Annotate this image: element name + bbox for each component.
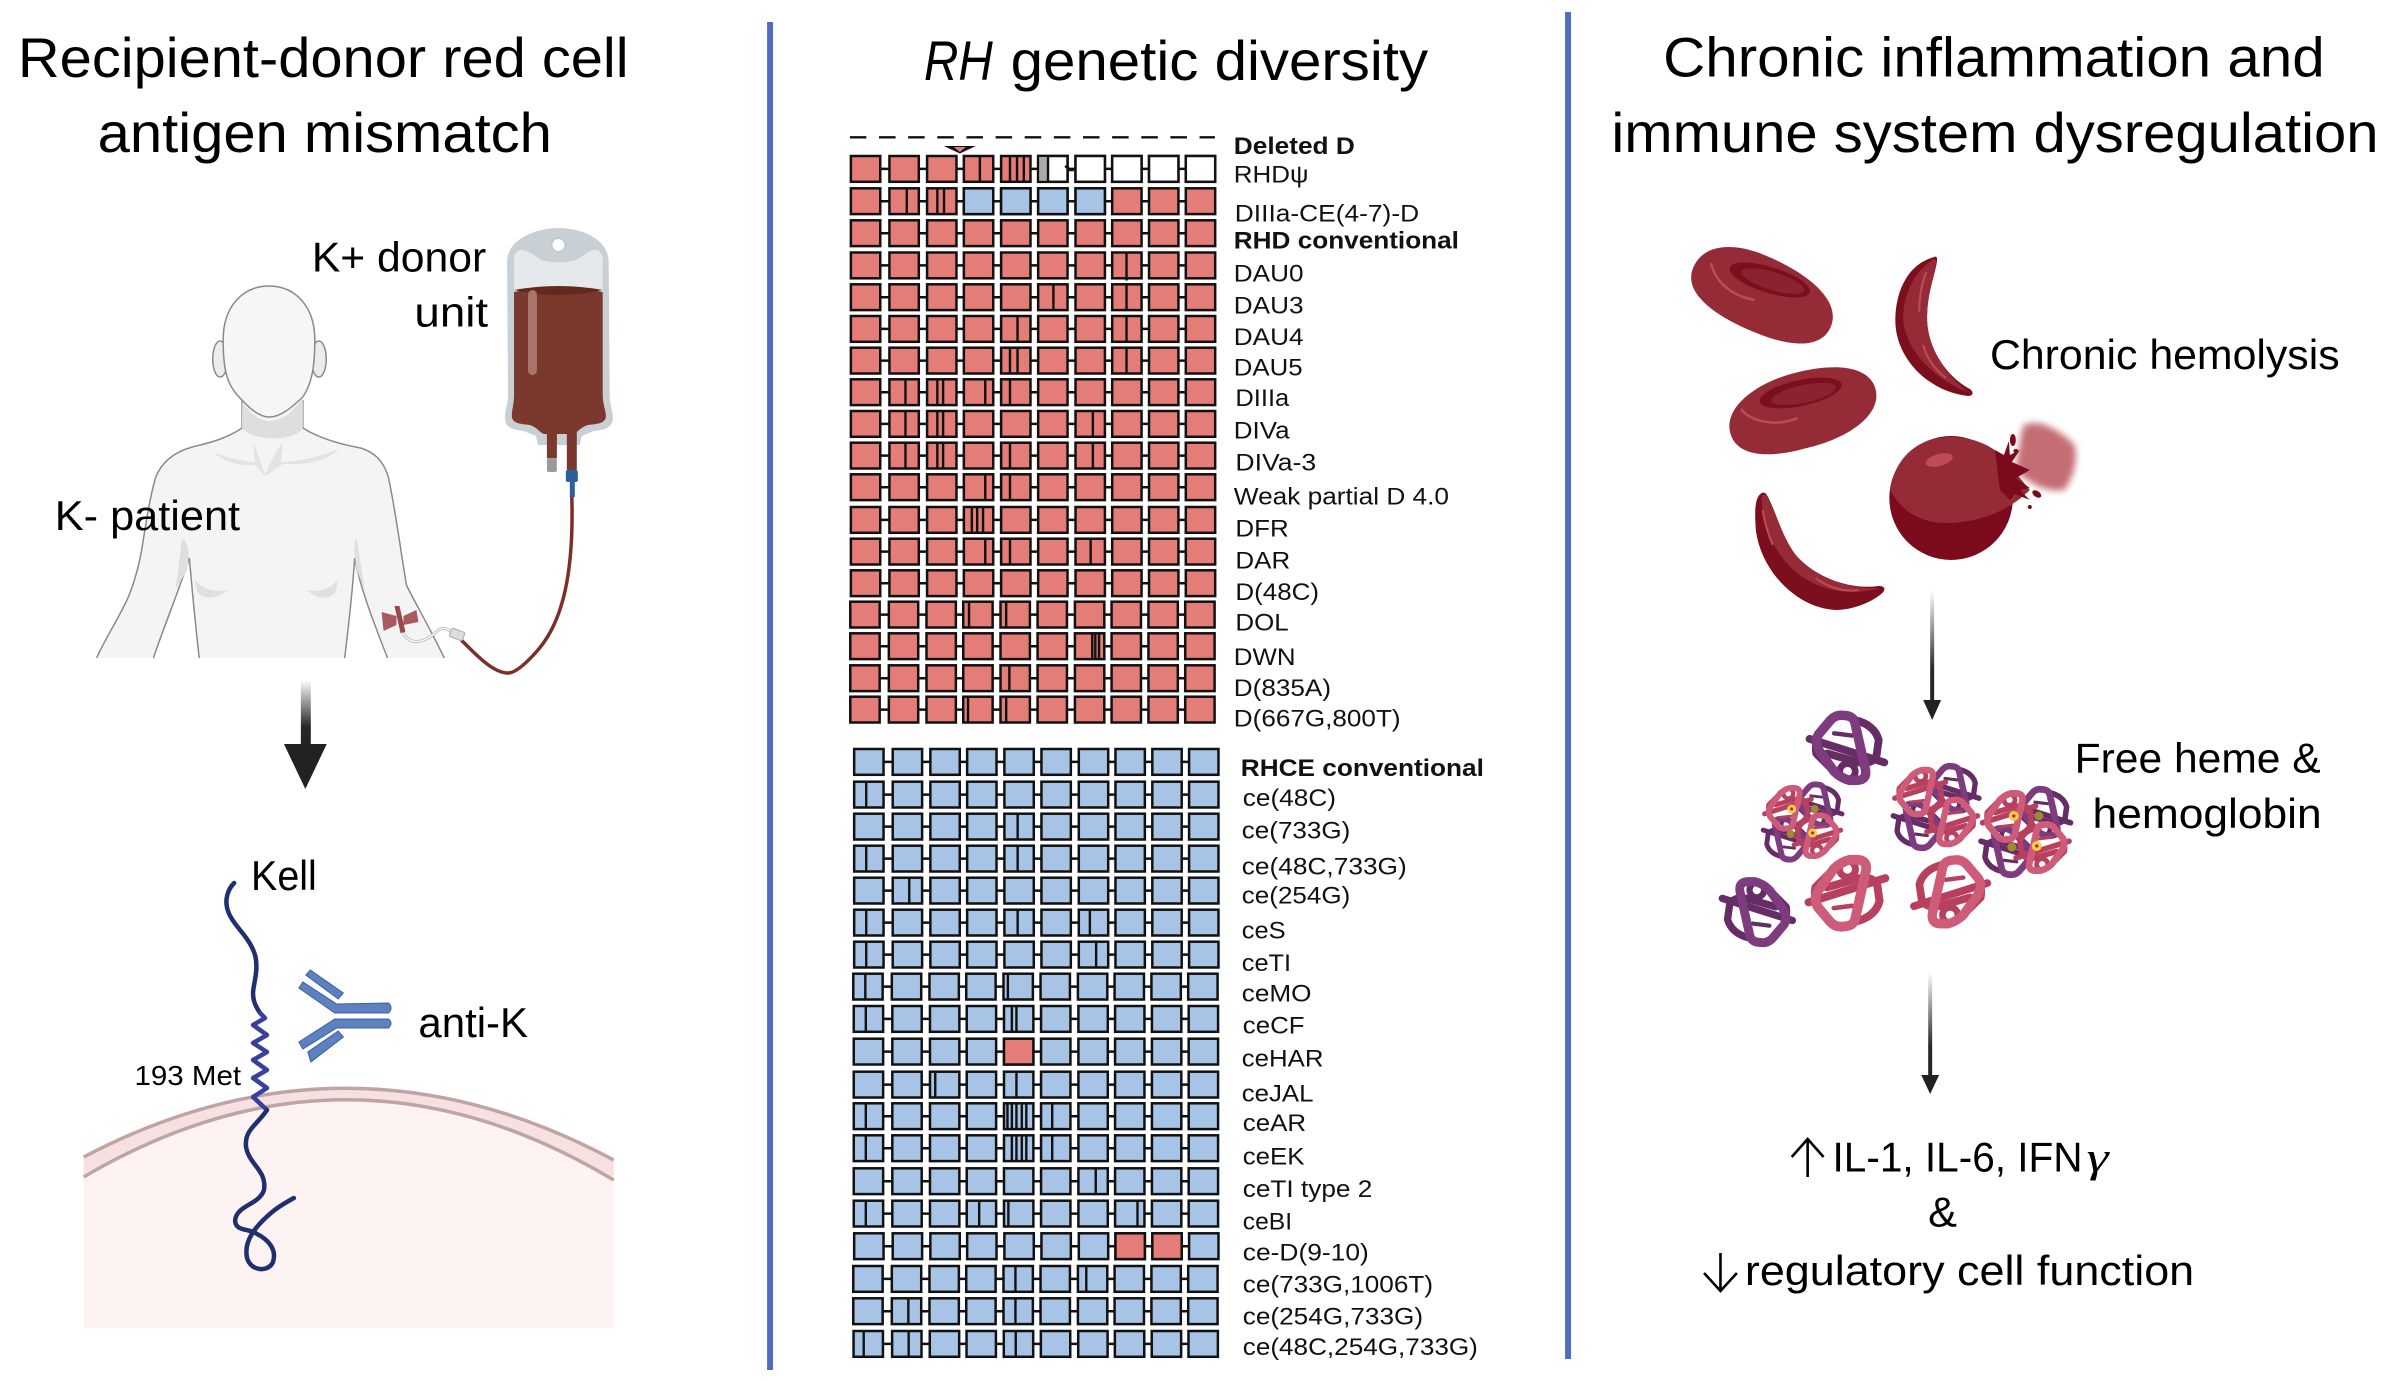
row: ceTI type 2 — [854, 1168, 1372, 1203]
row: DIIIa-CE(4-7)-D: DIIIa-CE(4-7)-D — [1235, 201, 1419, 228]
row: Deleted D: Deleted D — [1234, 133, 1355, 160]
heading: right panel: Chronic inflammation and — [1663, 26, 2325, 89]
heading: left panel — [18, 26, 629, 164]
row: ce(48C,254G,733G): ce(48C,254G,733G) — [1243, 1334, 1478, 1361]
row: ceAR: ceAR — [1243, 1110, 1306, 1137]
row: DWN — [850, 633, 1296, 671]
row: ce(48C,254G,733G) — [854, 1331, 1478, 1361]
text: immune changes — [1704, 1134, 2194, 1294]
row: D(835A) — [850, 665, 1331, 702]
row: ce(733G,1006T) — [853, 1266, 1433, 1298]
illustration: patient figure — [97, 286, 444, 658]
row: ce(48C,733G) — [854, 846, 1407, 880]
row: ce(254G,733G): ce(254G,733G) — [1243, 1303, 1423, 1330]
illustration: blood bag — [505, 228, 613, 497]
row: ceEK — [854, 1135, 1305, 1170]
row: DAU0: DAU0 — [1234, 261, 1304, 288]
row: RHCE conventional: RHCE conventional — [1241, 755, 1484, 782]
row: D(667G,800T) — [850, 697, 1401, 733]
label: K+ donor unit: unit — [414, 289, 489, 336]
row: Weak partial D 4.0: Weak partial D 4.0 — [1234, 483, 1449, 510]
row: ce(48C): ce(48C) — [1243, 785, 1336, 812]
row: D(835A): D(835A) — [1234, 675, 1331, 702]
icon: lysing red cell — [1889, 423, 2076, 560]
row: ceTI type 2: ceTI type 2 — [1243, 1176, 1372, 1203]
row: DOL: DOL — [1235, 610, 1289, 637]
row: ce(254G): ce(254G) — [1242, 882, 1350, 909]
label: Free heme & hemoglobin: hemoglobin — [2093, 790, 2322, 837]
row: ceBI — [854, 1201, 1292, 1235]
heading: left panel: Recipient-donor red cell — [18, 26, 629, 89]
row: ceJAL — [854, 1072, 1314, 1108]
label: anti-K: anti-K — [418, 999, 528, 1046]
icon: biconcave red cell lower — [1720, 356, 1885, 464]
row: DIIIa: DIIIa — [1235, 385, 1290, 412]
illustration: Kell protein — [226, 883, 294, 1269]
row: ceTI: ceTI — [1242, 950, 1291, 977]
row: DAU4: DAU4 — [1234, 324, 1304, 351]
icon: sickle cell upper — [1895, 257, 1973, 396]
row: ceS — [854, 910, 1286, 944]
arrow: free heme to immune changes — [1921, 972, 1939, 1094]
row: ce(48C,733G): ce(48C,733G) — [1242, 853, 1407, 880]
divider: left — [767, 22, 773, 1370]
row: ceEK: ceEK — [1243, 1143, 1305, 1170]
illustration: transfusion tube and butterfly needle — [382, 497, 572, 673]
row: RHDψ: RHDψ — [1234, 162, 1309, 189]
row: ceBI: ceBI — [1243, 1208, 1292, 1235]
icon: biconcave red cell upper — [1680, 233, 1846, 356]
row: ceHAR: ceHAR — [1242, 1046, 1323, 1073]
row: DWN: DWN — [1234, 644, 1296, 671]
label: Kell: Kell — [251, 852, 317, 899]
row: ceCF: ceCF — [1243, 1012, 1305, 1039]
row: RHCE conventional — [854, 749, 1484, 782]
text: immune changes: IL-1, IL-6, IFN — [1833, 1134, 2083, 1181]
text: immune changes: & — [1928, 1189, 1957, 1236]
illustration: cell membrane — [84, 1088, 614, 1328]
text: immune changes: regulatory cell function — [1745, 1247, 2194, 1294]
icon: up arrow — [1792, 1139, 1824, 1177]
panel: recipient-donor mismatch — [18, 26, 629, 1328]
icon: down arrow — [1704, 1253, 1737, 1291]
row: ce(48C) — [854, 782, 1336, 812]
row: ce-D(9-10) — [854, 1233, 1369, 1267]
heading: left panel: antigen mismatch — [98, 101, 552, 164]
row: ce-D(9-10): ce-D(9-10) — [1243, 1240, 1369, 1267]
row: D(48C): D(48C) — [1235, 579, 1319, 606]
row: RHD conventional: RHD conventional — [1234, 227, 1459, 254]
divider: right — [1565, 12, 1571, 1359]
row: DIVa-3: DIVa-3 — [1235, 450, 1316, 477]
row: ce(254G) — [854, 878, 1350, 909]
row: DIVa-3 — [851, 443, 1316, 477]
row: ceCF — [854, 1006, 1305, 1039]
row: ce(733G,1006T): ce(733G,1006T) — [1243, 1271, 1433, 1298]
heading: center panel: genetic diversity — [1011, 29, 1428, 92]
row: ceMO — [853, 974, 1312, 1008]
row: DAR: DAR — [1235, 547, 1290, 574]
icon: hemoglobin cluster — [1722, 715, 2071, 943]
row: ce(254G,733G) — [853, 1298, 1423, 1330]
icon: sickle cell lower — [1755, 493, 1884, 610]
panel: RH genetic diversity — [850, 29, 1484, 1361]
row: DAR — [851, 539, 1290, 574]
row: ceJAL: ceJAL — [1242, 1081, 1314, 1108]
row: ce(733G) — [854, 814, 1350, 845]
row: DAU5: DAU5 — [1234, 355, 1303, 382]
row: DAU5 — [851, 348, 1303, 382]
label: 193 Met: 193 Met — [134, 1060, 241, 1091]
row: DFR — [851, 507, 1289, 543]
row: ceHAR — [854, 1039, 1323, 1073]
row: RHDψ — [851, 146, 1309, 189]
row: DFR: DFR — [1235, 516, 1289, 543]
label: Free heme & hemoglobin — [2075, 735, 2322, 837]
row: DIVa — [851, 411, 1290, 444]
icon: anti-K antibody — [299, 970, 391, 1062]
row: ceTI — [854, 942, 1291, 977]
row: D(48C) — [851, 570, 1319, 606]
row: RHD conventional — [851, 220, 1459, 254]
heading: right panel — [1611, 26, 2378, 164]
row: DAU4 — [851, 316, 1304, 351]
panel: chronic inflammation — [1611, 26, 2378, 1294]
row: DIIIa — [851, 379, 1290, 412]
text: immune changes: γ — [2087, 1136, 2110, 1182]
row: DIIIa-CE(4-7)-D — [851, 188, 1419, 228]
row: ceS: ceS — [1242, 917, 1286, 944]
label: Chronic hemolysis: Chronic hemolysis — [1990, 331, 2340, 378]
label: K+ donor unit — [312, 234, 489, 336]
row: Weak partial D 4.0 — [851, 474, 1449, 510]
heading: center panel: RH — [924, 29, 993, 92]
heading: right panel: immune system dysregulation — [1611, 101, 2378, 164]
label: Free heme & hemoglobin: Free heme & — [2075, 735, 2321, 782]
row: D(667G,800T): D(667G,800T) — [1234, 706, 1401, 733]
label: K+ donor unit: K+ donor — [312, 234, 486, 281]
row: DAU3: DAU3 — [1234, 292, 1304, 319]
row: ceMO: ceMO — [1242, 981, 1312, 1008]
row: ceAR — [854, 1103, 1306, 1137]
arrow: large down — [284, 680, 327, 789]
row: ce(733G): ce(733G) — [1242, 818, 1350, 845]
row: DOL — [850, 602, 1289, 637]
label: K- patient: K- patient — [55, 492, 240, 539]
row: DIVa: DIVa — [1234, 417, 1290, 444]
row: DAU0 — [851, 252, 1304, 288]
row: DAU3 — [851, 284, 1304, 319]
arrow: hemolysis to free heme — [1923, 590, 1941, 720]
